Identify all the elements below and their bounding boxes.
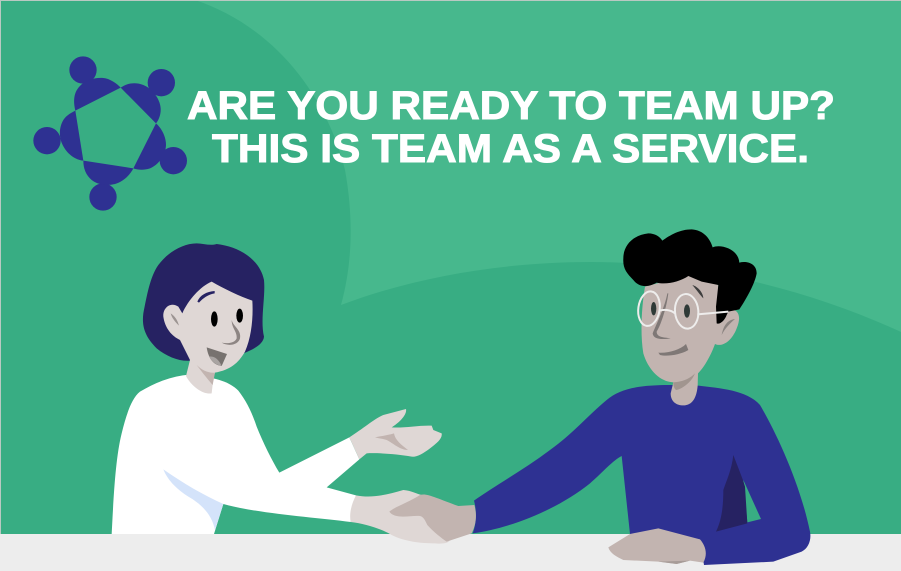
woman palm shadow [375, 433, 408, 450]
woman figure [112, 243, 450, 544]
man sweater [473, 385, 810, 565]
woman eyes [211, 309, 243, 327]
logo: team circle [33, 56, 187, 211]
man shaking hand [389, 494, 476, 542]
man eyebrow [692, 285, 703, 298]
woman raised hand [349, 409, 442, 459]
title: ARE YOU READY TO TEAM UP? [187, 84, 835, 128]
woman sweater shade [163, 469, 223, 530]
woman face [163, 282, 253, 394]
man sweater shade [716, 455, 747, 532]
woman mouth [207, 347, 227, 366]
man figure [473, 229, 810, 565]
man hand shadow [658, 561, 690, 564]
title [187, 84, 835, 171]
man hand on table [608, 528, 706, 564]
title: THIS IS TEAM AS A SERVICE. [212, 127, 809, 171]
man nose [653, 293, 671, 339]
man ear detail [722, 319, 735, 335]
glasses [636, 290, 728, 330]
woman nose [222, 320, 240, 345]
woman hair [143, 243, 264, 361]
woman ear detail [171, 313, 179, 326]
woman shaking hand [350, 490, 450, 544]
gap between arm and torso [743, 480, 761, 522]
man neck shadow [673, 373, 695, 390]
man head [642, 275, 739, 405]
man mouth [658, 344, 688, 356]
man eyes [651, 302, 690, 318]
woman neck shadow [197, 365, 215, 385]
woman eyebrow [197, 291, 215, 303]
table [0, 534, 901, 571]
woman sweater [112, 375, 359, 534]
man hair [623, 229, 757, 324]
